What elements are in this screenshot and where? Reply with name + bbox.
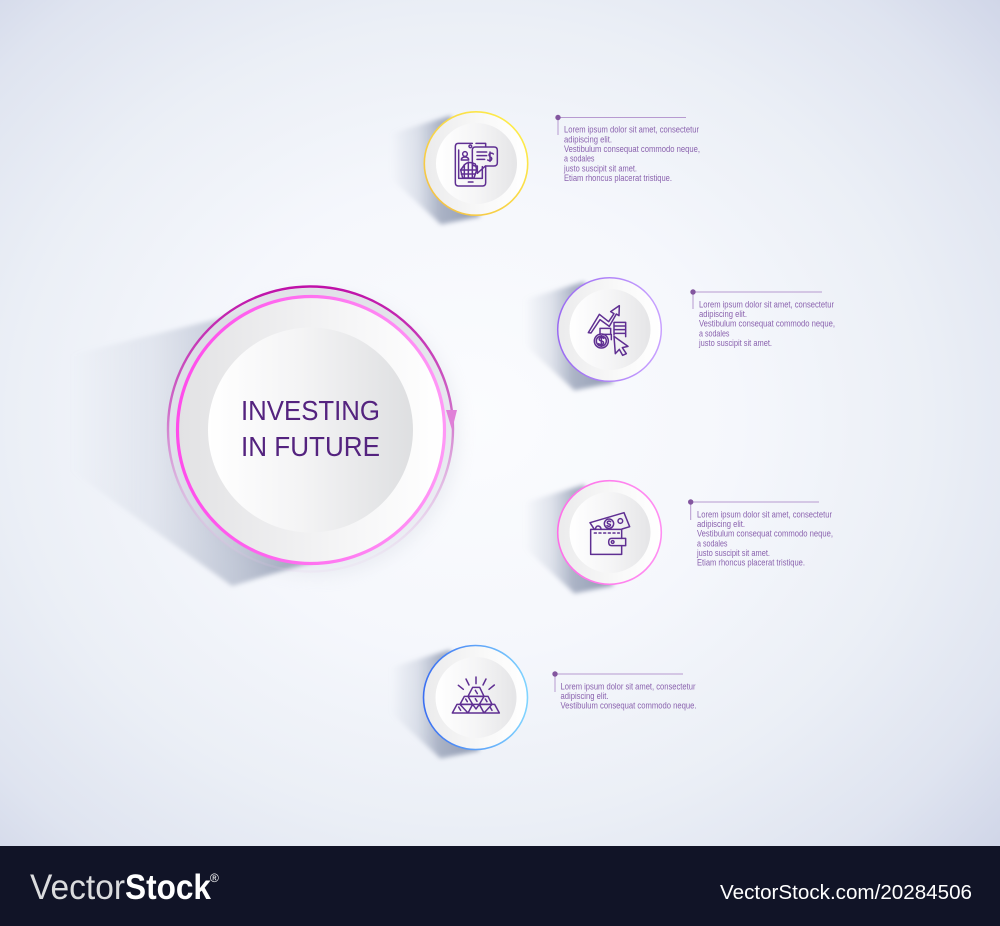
item 3 shadow — [524, 484, 614, 594]
item 1 text: Vestibulum consequat commodo neque, — [564, 144, 700, 154]
item 1 text: Lorem ipsum dolor sit amet, consectetur — [564, 125, 699, 135]
title — [241, 395, 380, 462]
item 3 text: Lorem ipsum dolor sit amet, consectetur — [697, 509, 832, 519]
icon: chart arrow, coins and cursor — [588, 306, 628, 355]
item 4 shadow — [390, 650, 480, 758]
circular arrow arc — [168, 286, 453, 572]
item 2 leader line — [690, 289, 822, 309]
item 2 outer disc — [558, 278, 661, 381]
icon: wallet with banknote — [590, 513, 630, 554]
item 1 leader line — [555, 115, 686, 135]
item 3 text: Etiam rhoncus placerat tristique. — [697, 558, 805, 568]
item 2: growth chart — [524, 278, 835, 390]
main circle soft glow — [178, 294, 458, 574]
item 3 text: a sodales — [697, 538, 728, 548]
footer background — [0, 846, 1000, 926]
item 4 text: adipiscing elit. — [560, 691, 608, 701]
item 2 text: justo suscipit sit amet. — [698, 338, 772, 348]
logo: VectorStock — [30, 868, 219, 907]
logo: VectorStock: ® — [210, 871, 219, 885]
item 1 text — [563, 125, 700, 183]
icon: tablet with chat and coins — [455, 143, 497, 186]
title: IN FUTURE — [241, 431, 380, 462]
item 4 leader line — [552, 671, 683, 692]
item 1 text: adipiscing elit. — [564, 134, 612, 144]
item 4 outer disc — [424, 646, 528, 750]
footer banner — [0, 846, 1000, 926]
main circle: investing in future — [70, 286, 458, 586]
item 3 text: adipiscing elit. — [697, 519, 745, 529]
item 3 leader line — [688, 499, 819, 520]
item 2 text — [698, 299, 835, 348]
main inner disc — [208, 328, 413, 532]
item 4 inner disc — [436, 657, 516, 738]
item 3 text: justo suscipit sit amet. — [696, 548, 770, 558]
item 4 text: Vestibulum consequat commodo neque. — [560, 701, 696, 711]
item 3 text: Vestibulum consequat commodo neque, — [697, 529, 833, 539]
item 1 text: Etiam rhoncus placerat tristique. — [564, 173, 672, 183]
item 2 text: Vestibulum consequat commodo neque, — [699, 319, 835, 329]
item 1 shadow — [391, 116, 480, 224]
item 2 shadow — [524, 282, 614, 390]
item 3 inner disc — [570, 492, 650, 573]
item 2 text: Lorem ipsum dolor sit amet, consectetur — [699, 299, 834, 309]
logo: VectorStock: Vector — [30, 868, 125, 907]
icon: pile of gold bars with shine — [452, 677, 499, 713]
item 3 outer disc — [558, 481, 661, 584]
item 1 outer disc — [424, 112, 528, 215]
item 4 text: Lorem ipsum dolor sit amet, consectetur — [560, 681, 696, 691]
image id: VectorStock.com/20284506 — [720, 882, 972, 904]
item 3 text — [696, 509, 833, 568]
item 3: wallet — [524, 481, 833, 594]
item 4 text — [560, 681, 696, 711]
arrow head — [446, 410, 457, 430]
item 2 inner disc — [570, 289, 650, 370]
band between disc and arc — [168, 288, 452, 572]
main outer disc — [178, 296, 444, 564]
item 1: mobile payments — [391, 112, 700, 224]
item 1 text: a sodales — [564, 154, 595, 164]
item 4: gold bars — [390, 646, 696, 758]
title: INVESTING — [241, 395, 380, 426]
main circle long shadow — [70, 311, 312, 586]
item 2 text: a sodales — [699, 328, 730, 338]
item 1 text: justo suscipit sit amet. — [563, 163, 637, 173]
item 2 text: adipiscing elit. — [699, 309, 747, 319]
item 1 inner disc — [436, 123, 517, 204]
logo: VectorStock: Stock — [125, 868, 211, 907]
